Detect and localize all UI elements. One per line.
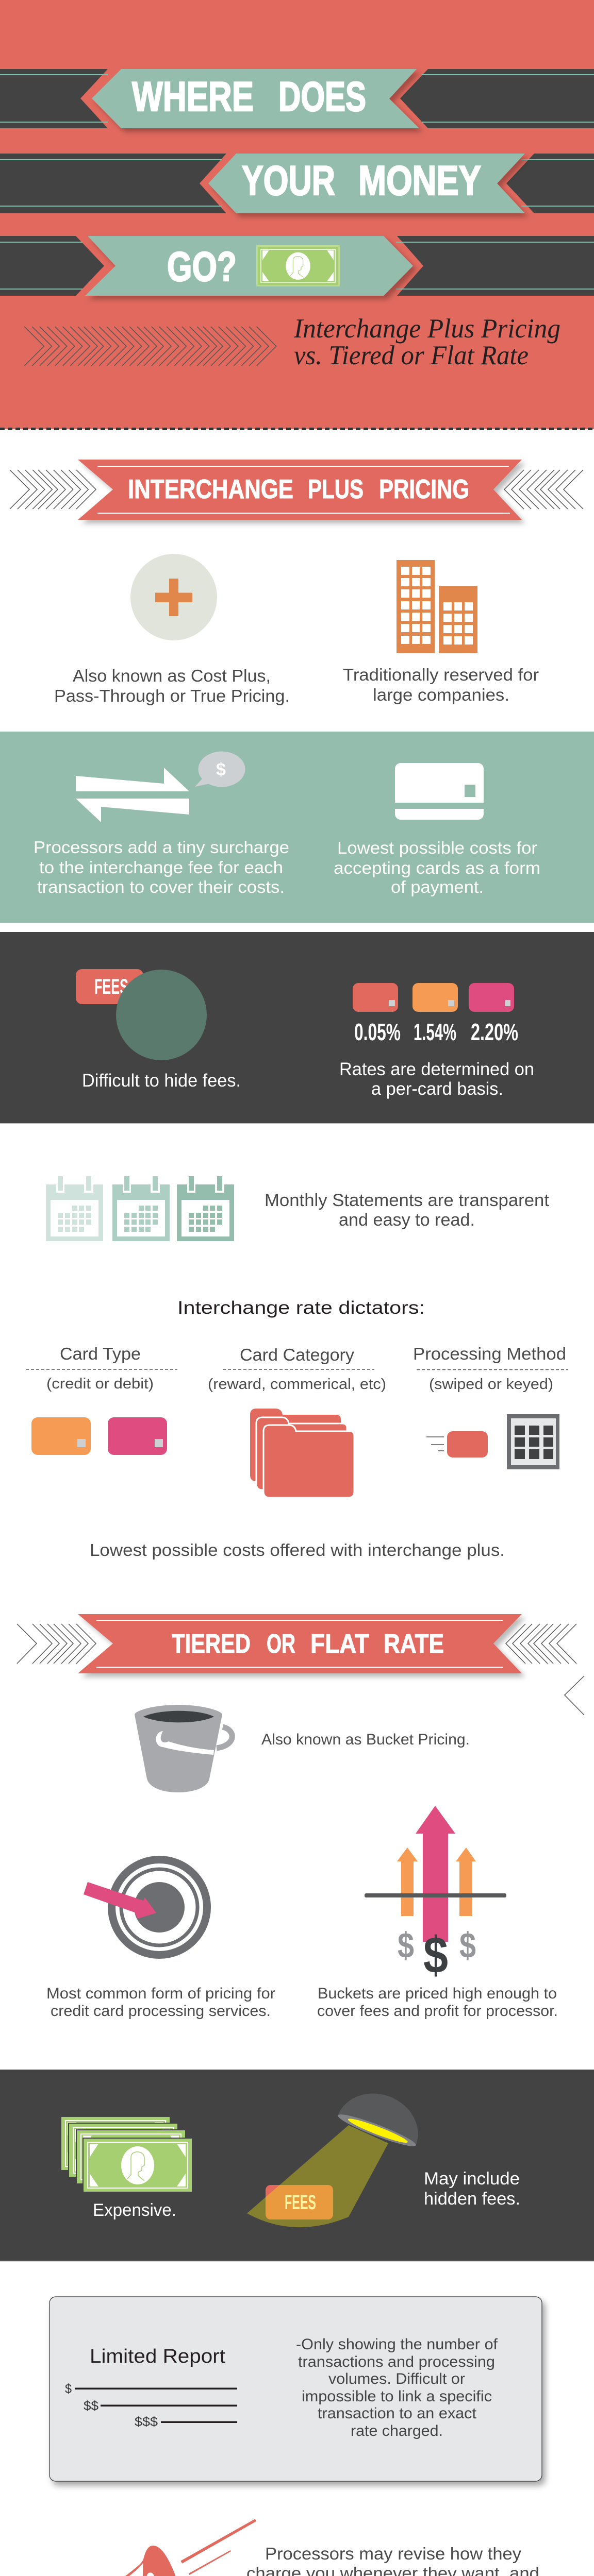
panel: dark expensive and hidden fees xyxy=(0,2070,594,2262)
text: report description: transactions and processing xyxy=(298,2353,495,2370)
icon: three rate cards xyxy=(353,983,514,1012)
text: buckets are priced: Buckets are priced high enough to xyxy=(318,1985,557,2002)
icon: big bucket xyxy=(135,1705,232,1792)
chevron arrow strip xyxy=(24,327,276,366)
text: difficult to hide fees: Difficult to hide fees. xyxy=(82,1071,241,1091)
chart: report lines: $ xyxy=(65,2382,72,2396)
chart: report lines xyxy=(65,2382,237,2429)
heading ribbon: tiered or flat rate: TIERED xyxy=(172,1629,251,1659)
text: expensive: Expensive. xyxy=(93,2200,176,2220)
text: rates are determined: a per-card basis. xyxy=(371,1079,503,1099)
text: processors add: transaction to cover their costs. xyxy=(37,877,285,896)
icon: folders xyxy=(250,1409,354,1498)
text: report description: volumes. Difficult or xyxy=(328,2370,465,2387)
column: card type: Card Type xyxy=(60,1344,141,1363)
text: processors may revise: Processors may revise how they xyxy=(265,2544,522,2563)
text: also known as: Also known as Cost Plus, xyxy=(73,666,271,685)
column: card type: (credit or debit) xyxy=(46,1376,154,1392)
text: monthly statements: Monthly Statements are transparent xyxy=(265,1191,550,1210)
text: traditionally reserved xyxy=(343,665,539,704)
title band: your money: YOUR xyxy=(242,158,335,204)
icon: target with arrow xyxy=(84,1860,207,1955)
text: monthly statements: and easy to read. xyxy=(339,1210,475,1230)
icon: keypad xyxy=(507,1414,559,1469)
title band: your money: MONEY xyxy=(358,158,481,204)
text: traditionally reserved: Traditionally reserved for xyxy=(343,665,539,684)
icon: three calendars xyxy=(46,1176,234,1241)
heading ribbon: tiered or flat rate xyxy=(17,1614,584,1715)
title band: where does: DOES xyxy=(278,74,366,120)
text: lowest possible costs offered: Lowest possible costs offered with interchange plus. xyxy=(90,1540,505,1560)
heading ribbon: tiered or flat rate: OR xyxy=(267,1629,295,1659)
title band: where does xyxy=(0,69,594,128)
text: lowest possible costs: Lowest possible costs for xyxy=(337,838,537,857)
column: card category: Card Category xyxy=(240,1345,355,1364)
text: buckets are priced xyxy=(317,1985,558,2020)
icon: rising arrows with dollars xyxy=(365,1806,506,1984)
icon: two cards xyxy=(31,1417,167,1455)
heading ribbon: interchange plus pricing: PLUS xyxy=(308,474,364,504)
icon: spotlight on fees xyxy=(247,2094,418,2228)
heading ribbon: interchange plus pricing: INTERCHANGE xyxy=(128,474,293,504)
text: processors may revise xyxy=(246,2544,539,2576)
text: may include hidden fees: May include xyxy=(424,2169,520,2189)
text: processors add xyxy=(34,838,289,896)
rate numbers: 0.05% xyxy=(354,1019,401,1045)
header panel xyxy=(0,0,594,429)
heading ribbon: tiered or flat rate: FLAT xyxy=(310,1629,369,1659)
text: processors add: to the interchange fee for each xyxy=(39,858,283,877)
title band: go: GO? xyxy=(167,244,237,290)
text: also known as xyxy=(54,666,290,705)
chart: report lines: $$ xyxy=(84,2399,98,2413)
icon: white card xyxy=(395,763,484,820)
column: card category xyxy=(208,1345,386,1498)
panel: teal facts xyxy=(0,732,594,923)
title band: go xyxy=(0,236,594,296)
heading ribbon: tiered or flat rate: RATE xyxy=(384,1629,444,1659)
text: report description xyxy=(296,2336,498,2439)
title band: where does: WHERE xyxy=(132,74,254,120)
panel: limited report xyxy=(50,2297,542,2481)
text: rates are determined: Rates are determined on xyxy=(339,1059,534,1079)
text: rates are determined xyxy=(339,1059,534,1099)
text: most common form: Most common form of pricing for xyxy=(46,1985,275,2002)
column: card category: (reward, commerical, etc) xyxy=(208,1376,386,1393)
text: may include hidden fees: hidden fees. xyxy=(424,2189,520,2209)
column: processing method: (swiped or keyed) xyxy=(429,1376,553,1393)
text: lowest possible costs: of payment. xyxy=(391,877,484,896)
icon: fees tag behind circle xyxy=(76,969,207,1060)
rate numbers: 2.20% xyxy=(471,1019,518,1045)
icon: fees tag behind circle: FEES xyxy=(94,974,128,998)
heading ribbon: interchange plus pricing xyxy=(10,460,583,520)
rate numbers: 1.54% xyxy=(414,1019,456,1045)
icon: rising arrows with dollars: $ xyxy=(398,1925,414,1965)
text: report description: transaction to an exact xyxy=(318,2405,477,2422)
text: lowest possible costs: accepting cards as a form xyxy=(334,858,540,877)
text: also known as: Pass-Through or True Pricing. xyxy=(54,686,290,705)
icon: plus circle xyxy=(130,554,217,640)
subtitle: Interchange Plus Pricing xyxy=(293,314,560,344)
heading: limited report: Limited Report xyxy=(90,2346,225,2367)
icon: stack of bills xyxy=(61,2117,192,2192)
panel: dark facts xyxy=(0,932,594,1124)
icon: dollar speech bubble xyxy=(195,751,245,787)
text: buckets are priced: cover fees and profit for processor. xyxy=(317,2003,558,2020)
icon: swiped card xyxy=(426,1431,488,1458)
icon: dollar bill xyxy=(256,245,340,286)
heading: interchange rate dictators: Interchange rate dictators: xyxy=(177,1298,425,1318)
icon: rising arrows with dollars: $ xyxy=(459,1925,476,1965)
text: report description: impossible to link a specific xyxy=(302,2388,492,2405)
column: processing method xyxy=(413,1344,568,1469)
icon: megaphone xyxy=(51,2519,272,2576)
text: most common form xyxy=(46,1985,275,2020)
text: traditionally reserved: large companies. xyxy=(373,685,509,704)
heading ribbon: interchange plus pricing: PRICING xyxy=(379,474,469,504)
icon: spotlight on fees: FEES xyxy=(285,2191,316,2214)
text: monthly statements xyxy=(265,1191,550,1230)
text: may include hidden fees xyxy=(424,2169,520,2209)
text: most common form: credit card processing services. xyxy=(51,2003,271,2020)
icon: exchange arrows xyxy=(76,768,189,822)
icon: dollar speech bubble: $ xyxy=(216,760,226,779)
text: report description: -Only showing the number of xyxy=(296,2336,498,2353)
text: bucket pricing: Also known as Bucket Pricing. xyxy=(261,1731,470,1748)
icon: buildings xyxy=(397,560,477,653)
icon: rising arrows with dollars: $ xyxy=(423,1926,448,1984)
column: card type xyxy=(26,1344,177,1455)
text: report description: rate charged. xyxy=(351,2422,443,2439)
column: processing method: Processing Method xyxy=(413,1344,566,1363)
chart: report lines: $$$ xyxy=(135,2415,158,2429)
text: lowest possible costs xyxy=(334,838,540,896)
title band: your money xyxy=(0,154,594,213)
rate numbers xyxy=(354,1019,518,1045)
text: processors add: Processors add a tiny surcharge xyxy=(34,838,289,857)
subtitle xyxy=(293,314,560,370)
subtitle: vs. Tiered or Flat Rate xyxy=(294,341,529,370)
